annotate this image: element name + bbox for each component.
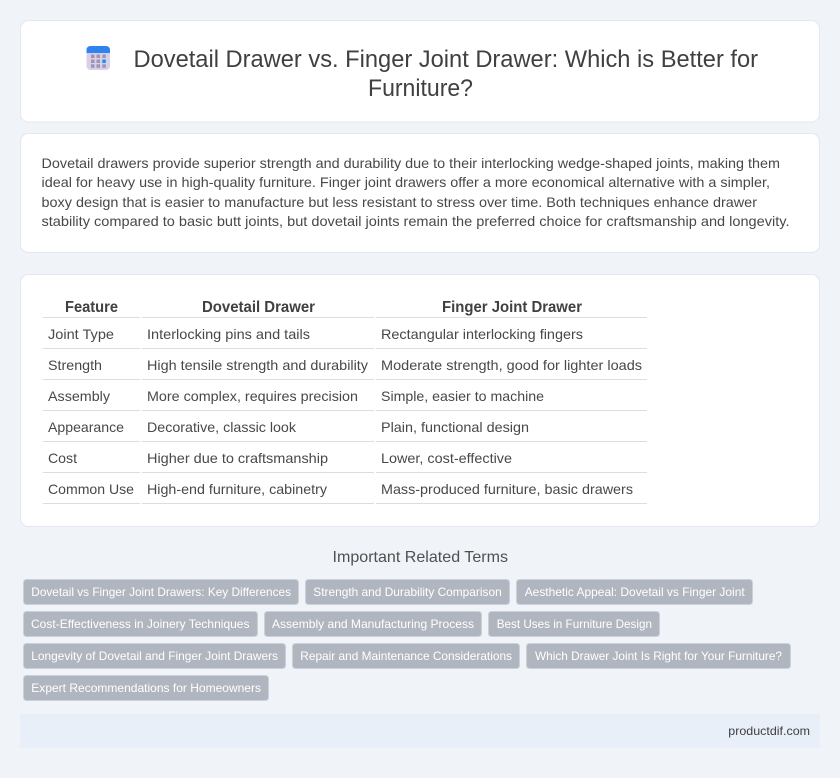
text block: summary: stability compared to basic butt joints, but dovetail joints remain the preferred choice for craftsmanship and longevity.	[42, 213, 790, 229]
tag	[306, 580, 510, 604]
tag	[24, 644, 286, 668]
tag	[24, 580, 298, 604]
title	[134, 46, 758, 102]
tag	[488, 612, 660, 636]
panel: introduction	[20, 134, 820, 252]
text block: summary: ideal for heavy use in high-quality furniture. Finger joint drawers offer a more economical alternative with a simpler,	[42, 174, 770, 190]
row: cost	[43, 450, 647, 473]
tag: Best Uses in Furniture Design	[497, 617, 652, 631]
row: strength: Strength	[48, 357, 102, 373]
title: Dovetail Drawer vs. Finger Joint Drawer: Which is Better for	[134, 46, 758, 73]
row: joint type: Rectangular interlocking fingers	[381, 326, 583, 342]
row: assembly	[43, 388, 647, 411]
row: common use: Common Use	[48, 481, 134, 497]
panel: header	[20, 20, 820, 122]
panel: comparison table	[20, 274, 820, 526]
text block: summary: Dovetail drawers provide superior strength and durability due to their interlocking wedge-shaped joints, making them	[42, 155, 780, 171]
row: assembly: Simple, easier to machine	[381, 388, 544, 404]
tag	[516, 580, 752, 604]
footer bar: productdif.com	[728, 724, 810, 738]
heading: important related terms: Important Related Terms	[332, 549, 508, 566]
row: joint type: Interlocking pins and tails	[147, 326, 310, 342]
row: assembly: More complex, requires precision	[147, 388, 358, 404]
tag: Expert Recommendations for Homeowners	[31, 681, 261, 695]
table header: Feature	[65, 299, 118, 316]
row: cost: Higher due to craftsmanship	[147, 450, 328, 466]
tag: Strength and Durability Comparison	[313, 585, 502, 599]
row: cost: Cost	[48, 450, 77, 466]
tag	[292, 644, 520, 668]
tag list: related terms	[24, 580, 790, 700]
row: strength: High tensile strength and durability	[147, 357, 368, 373]
row: cost: Lower, cost-effective	[381, 450, 512, 466]
tag	[24, 612, 258, 636]
row: appearance	[43, 419, 647, 442]
tag: Cost-Effectiveness in Joinery Techniques	[31, 617, 250, 631]
row: common use: Mass-produced furniture, basic drawers	[381, 481, 633, 497]
footer bar	[20, 714, 820, 748]
text block: summary	[42, 155, 790, 229]
tag: Dovetail vs Finger Joint Drawers: Key Differences	[31, 585, 291, 599]
table header: Finger Joint Drawer	[442, 299, 582, 316]
tag	[264, 612, 482, 636]
row: joint type: Joint Type	[48, 326, 114, 342]
tag: Assembly and Manufacturing Process	[272, 617, 474, 631]
tag: Longevity of Dovetail and Finger Joint Drawers	[31, 649, 278, 663]
row: appearance: Decorative, classic look	[147, 419, 297, 435]
tag: Aesthetic Appeal: Dovetail vs Finger Joint	[525, 585, 745, 599]
row: assembly: Assembly	[48, 388, 110, 404]
row: common use	[43, 481, 647, 504]
tag	[526, 644, 790, 668]
row: appearance: Appearance	[48, 419, 124, 435]
row: strength	[43, 357, 647, 380]
text block: summary: boxy design that is easier to manufacture but less resistant to stress over time. Both techniques enhance drawer	[42, 194, 757, 210]
row: common use: High-end furniture, cabinetry	[147, 481, 327, 497]
tag	[24, 676, 268, 700]
icon: calendar	[86, 46, 110, 70]
tag: Which Drawer Joint Is Right for Your Furniture?	[535, 649, 782, 663]
row: appearance: Plain, functional design	[381, 419, 529, 435]
row: joint type	[43, 326, 647, 349]
table header: Dovetail Drawer	[202, 299, 315, 316]
table header	[43, 299, 647, 318]
title: Furniture?	[368, 75, 473, 102]
row: strength: Moderate strength, good for lighter loads	[381, 357, 642, 373]
tag: Repair and Maintenance Considerations	[300, 649, 512, 663]
